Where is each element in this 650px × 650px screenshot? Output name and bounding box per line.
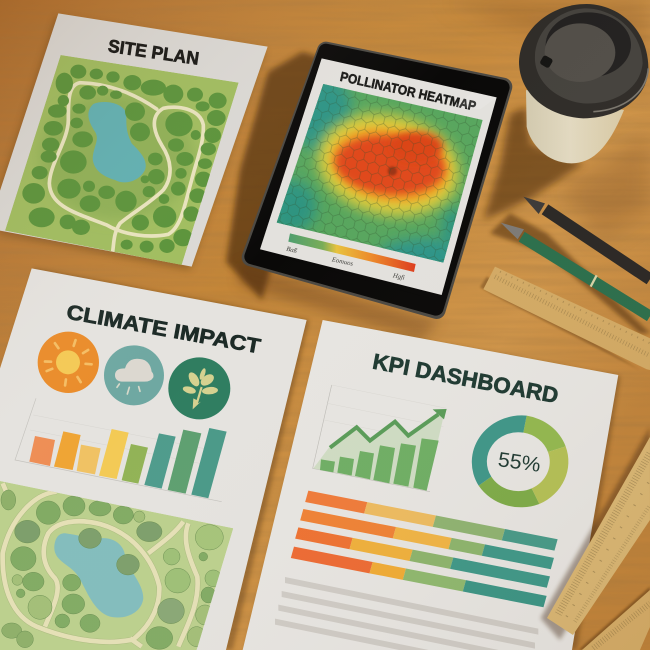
- wooden ruler right: [541, 427, 650, 640]
- tablet: [251, 51, 503, 310]
- lower wooden ruler: [578, 587, 650, 650]
- shadow: tablet: [226, 52, 330, 300]
- screen glare: [453, 92, 497, 109]
- cup body: [526, 90, 624, 163]
- green pen: [501, 223, 650, 316]
- legend labels: Hgfi: [391, 272, 405, 282]
- trees: [22, 65, 227, 253]
- coffee cup: [519, 4, 648, 163]
- icon: plant: [168, 357, 230, 419]
- KPI dashboard title: KPI DASHBOARD: [371, 349, 560, 408]
- watercolor site map: [0, 481, 233, 650]
- climate bar chart: [15, 398, 227, 502]
- legend labels: Eomuos: [330, 256, 354, 268]
- KPI dashboard sheet: [243, 320, 620, 650]
- map trees: [1, 490, 223, 649]
- placeholder text lines: [275, 577, 538, 650]
- wooden ruler top: [480, 267, 650, 370]
- climate impact title: CLIMATE IMPACT: [65, 301, 263, 358]
- legend labels: [286, 246, 405, 282]
- shadow: pens: [490, 213, 650, 333]
- heatmap title: POLLINATOR HEATMAP: [339, 69, 478, 114]
- map pond: [54, 533, 143, 617]
- map trails: [3, 483, 198, 647]
- icon: sun: [38, 332, 99, 393]
- pond: [88, 102, 146, 182]
- tablet screen paper: [260, 58, 497, 295]
- growth chart with arrow: [313, 385, 447, 492]
- pens: [490, 197, 650, 333]
- donut chart 55%: 55%: [497, 448, 542, 477]
- shadow: tablet base: [238, 262, 440, 340]
- lid sip hole: [539, 55, 553, 69]
- icon: rain cloud: [104, 345, 164, 405]
- legend labels: Baß: [286, 246, 298, 255]
- heatmap legend bar: [288, 233, 416, 272]
- black pen: [523, 197, 650, 279]
- site plan title: SITE PLAN: [107, 36, 200, 69]
- site plan sheet: [0, 13, 268, 270]
- cup lid: [519, 4, 648, 118]
- lid recess: [546, 12, 631, 78]
- pollinator heatmap: [276, 84, 482, 263]
- shadow: coffee cup: [483, 107, 583, 220]
- trail loops: [49, 83, 203, 252]
- donut chart 55%: [472, 415, 568, 507]
- stacked progress bars: [291, 491, 558, 607]
- climate impact sheet: [0, 268, 309, 650]
- site plan map: [5, 55, 239, 265]
